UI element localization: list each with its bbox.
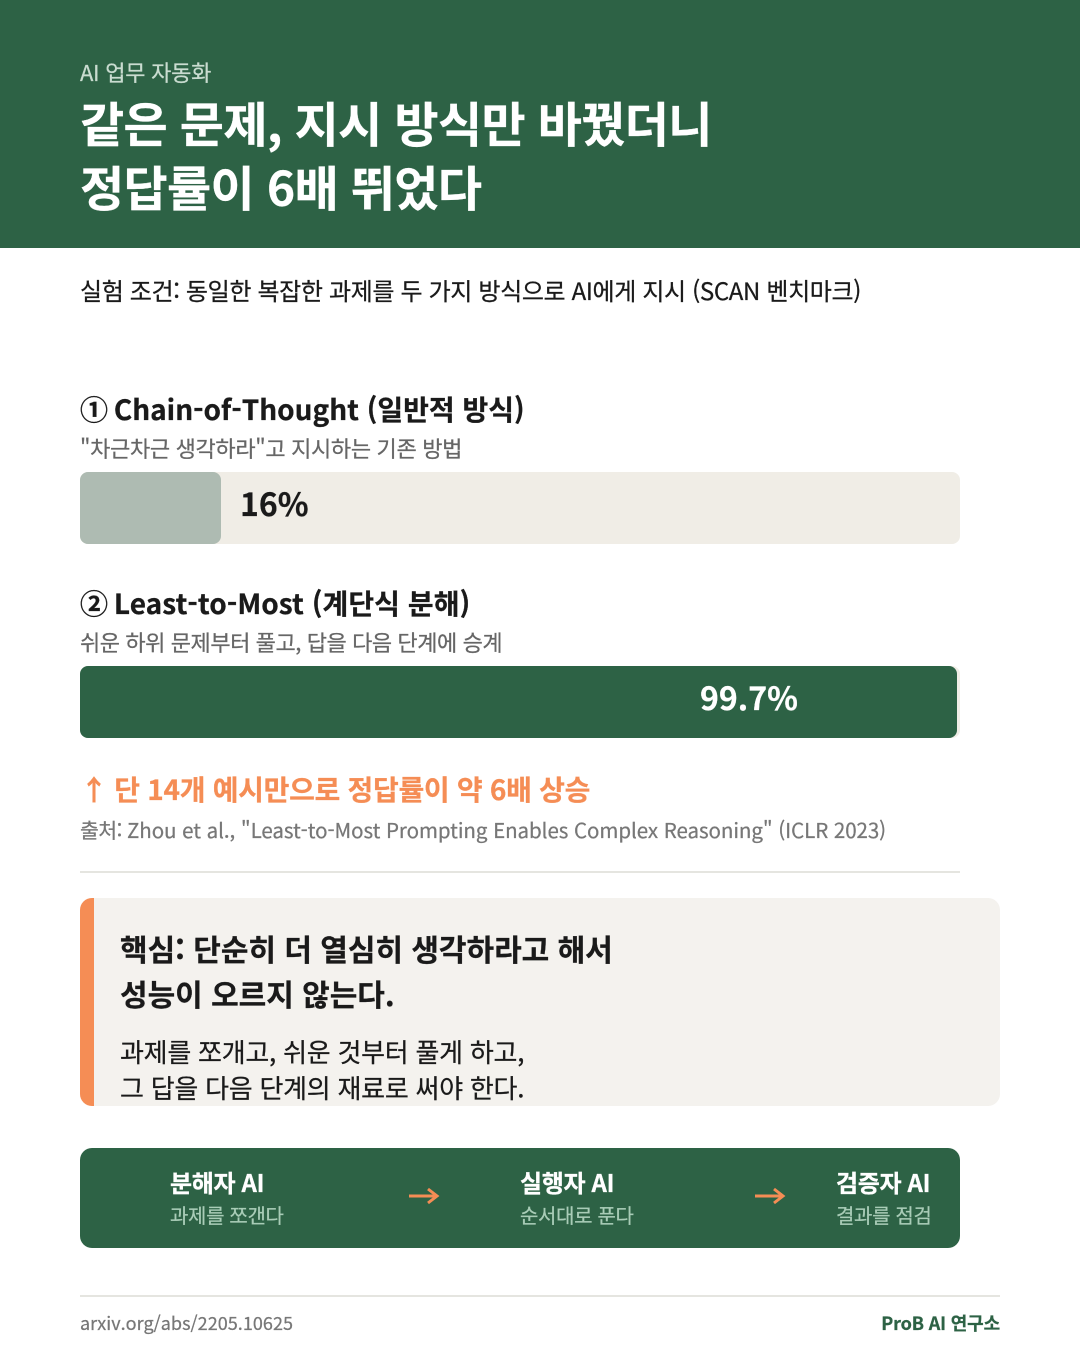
step 1: 과제를 쪼갠다 bbox=[170, 1200, 284, 1229]
step 2 bbox=[520, 1164, 634, 1229]
step 1 bbox=[170, 1164, 284, 1229]
callout: 6x improvement: ↑ 단 14개 예시만으로 정답률이 약 6배 상승 bbox=[80, 769, 590, 809]
bar fill 16% bbox=[80, 472, 221, 544]
footer brand: ProB AI 연구소 bbox=[881, 1310, 1000, 1336]
accent bar bbox=[80, 898, 94, 1106]
method 2 block bbox=[80, 583, 960, 738]
step 1: 분해자 AI bbox=[170, 1164, 264, 1199]
method 1 block bbox=[80, 389, 960, 544]
title: 정답률이 6배 뛰었다 bbox=[80, 150, 481, 220]
title: 같은 문제, 지시 방식만 바꿨더니 bbox=[80, 86, 712, 156]
bar fill 99.7% bbox=[80, 666, 957, 738]
panel: AI pipeline bbox=[80, 1148, 960, 1248]
panel: key insight bbox=[80, 898, 1000, 1106]
value 16%: 16% bbox=[240, 480, 309, 526]
bar chart: 16% bbox=[80, 472, 960, 544]
insight body: 그 답을 다음 단계의 재료로 써야 한다. bbox=[120, 1069, 524, 1106]
insight heading: 성능이 오르지 않는다. bbox=[120, 971, 395, 1015]
insight body bbox=[120, 1033, 524, 1106]
step 2: 순서대로 푼다 bbox=[520, 1200, 634, 1229]
footer source link: arxiv.org/abs/2205.10625 bbox=[80, 1310, 293, 1336]
bar chart: 99.7% bbox=[80, 666, 960, 738]
step 3: 검증자 AI bbox=[836, 1164, 930, 1199]
value 99.7%: 99.7% bbox=[700, 674, 798, 720]
eyebrow label: AI 업무 자동화 bbox=[80, 56, 211, 88]
arrow 2 bbox=[755, 1188, 786, 1204]
method 2 heading: ② Least-to-Most (계단식 분해) bbox=[80, 583, 470, 623]
method 2 description: 쉬운 하위 문제부터 풀고, 답을 다음 단계에 승계 bbox=[80, 626, 502, 658]
experiment conditions: 실험 조건: 동일한 복잡한 과제를 두 가지 방식으로 AI에게 지시 (SCAN 벤치마크) bbox=[80, 272, 861, 307]
insight heading: 핵심: 단순히 더 열심히 생각하라고 해서 bbox=[120, 926, 613, 970]
insight heading bbox=[120, 926, 613, 1015]
step 3: 결과를 점검 bbox=[836, 1200, 932, 1229]
source citation: 출처: Zhou et al., "Least-to-Most Prompting Enables Complex Reasoning" (ICLR 2023) bbox=[80, 814, 886, 844]
title bbox=[80, 86, 712, 220]
step 3 bbox=[836, 1164, 932, 1229]
header band bbox=[0, 0, 1080, 248]
method 1 heading: ① Chain-of-Thought (일반적 방식) bbox=[80, 389, 525, 429]
arrow 1 bbox=[409, 1188, 440, 1204]
insight body: 과제를 쪼개고, 쉬운 것부터 풀게 하고, bbox=[120, 1033, 524, 1070]
method 1 description: "차근차근 생각하라"고 지시하는 기존 방법 bbox=[80, 432, 462, 464]
step 2: 실행자 AI bbox=[520, 1164, 614, 1199]
